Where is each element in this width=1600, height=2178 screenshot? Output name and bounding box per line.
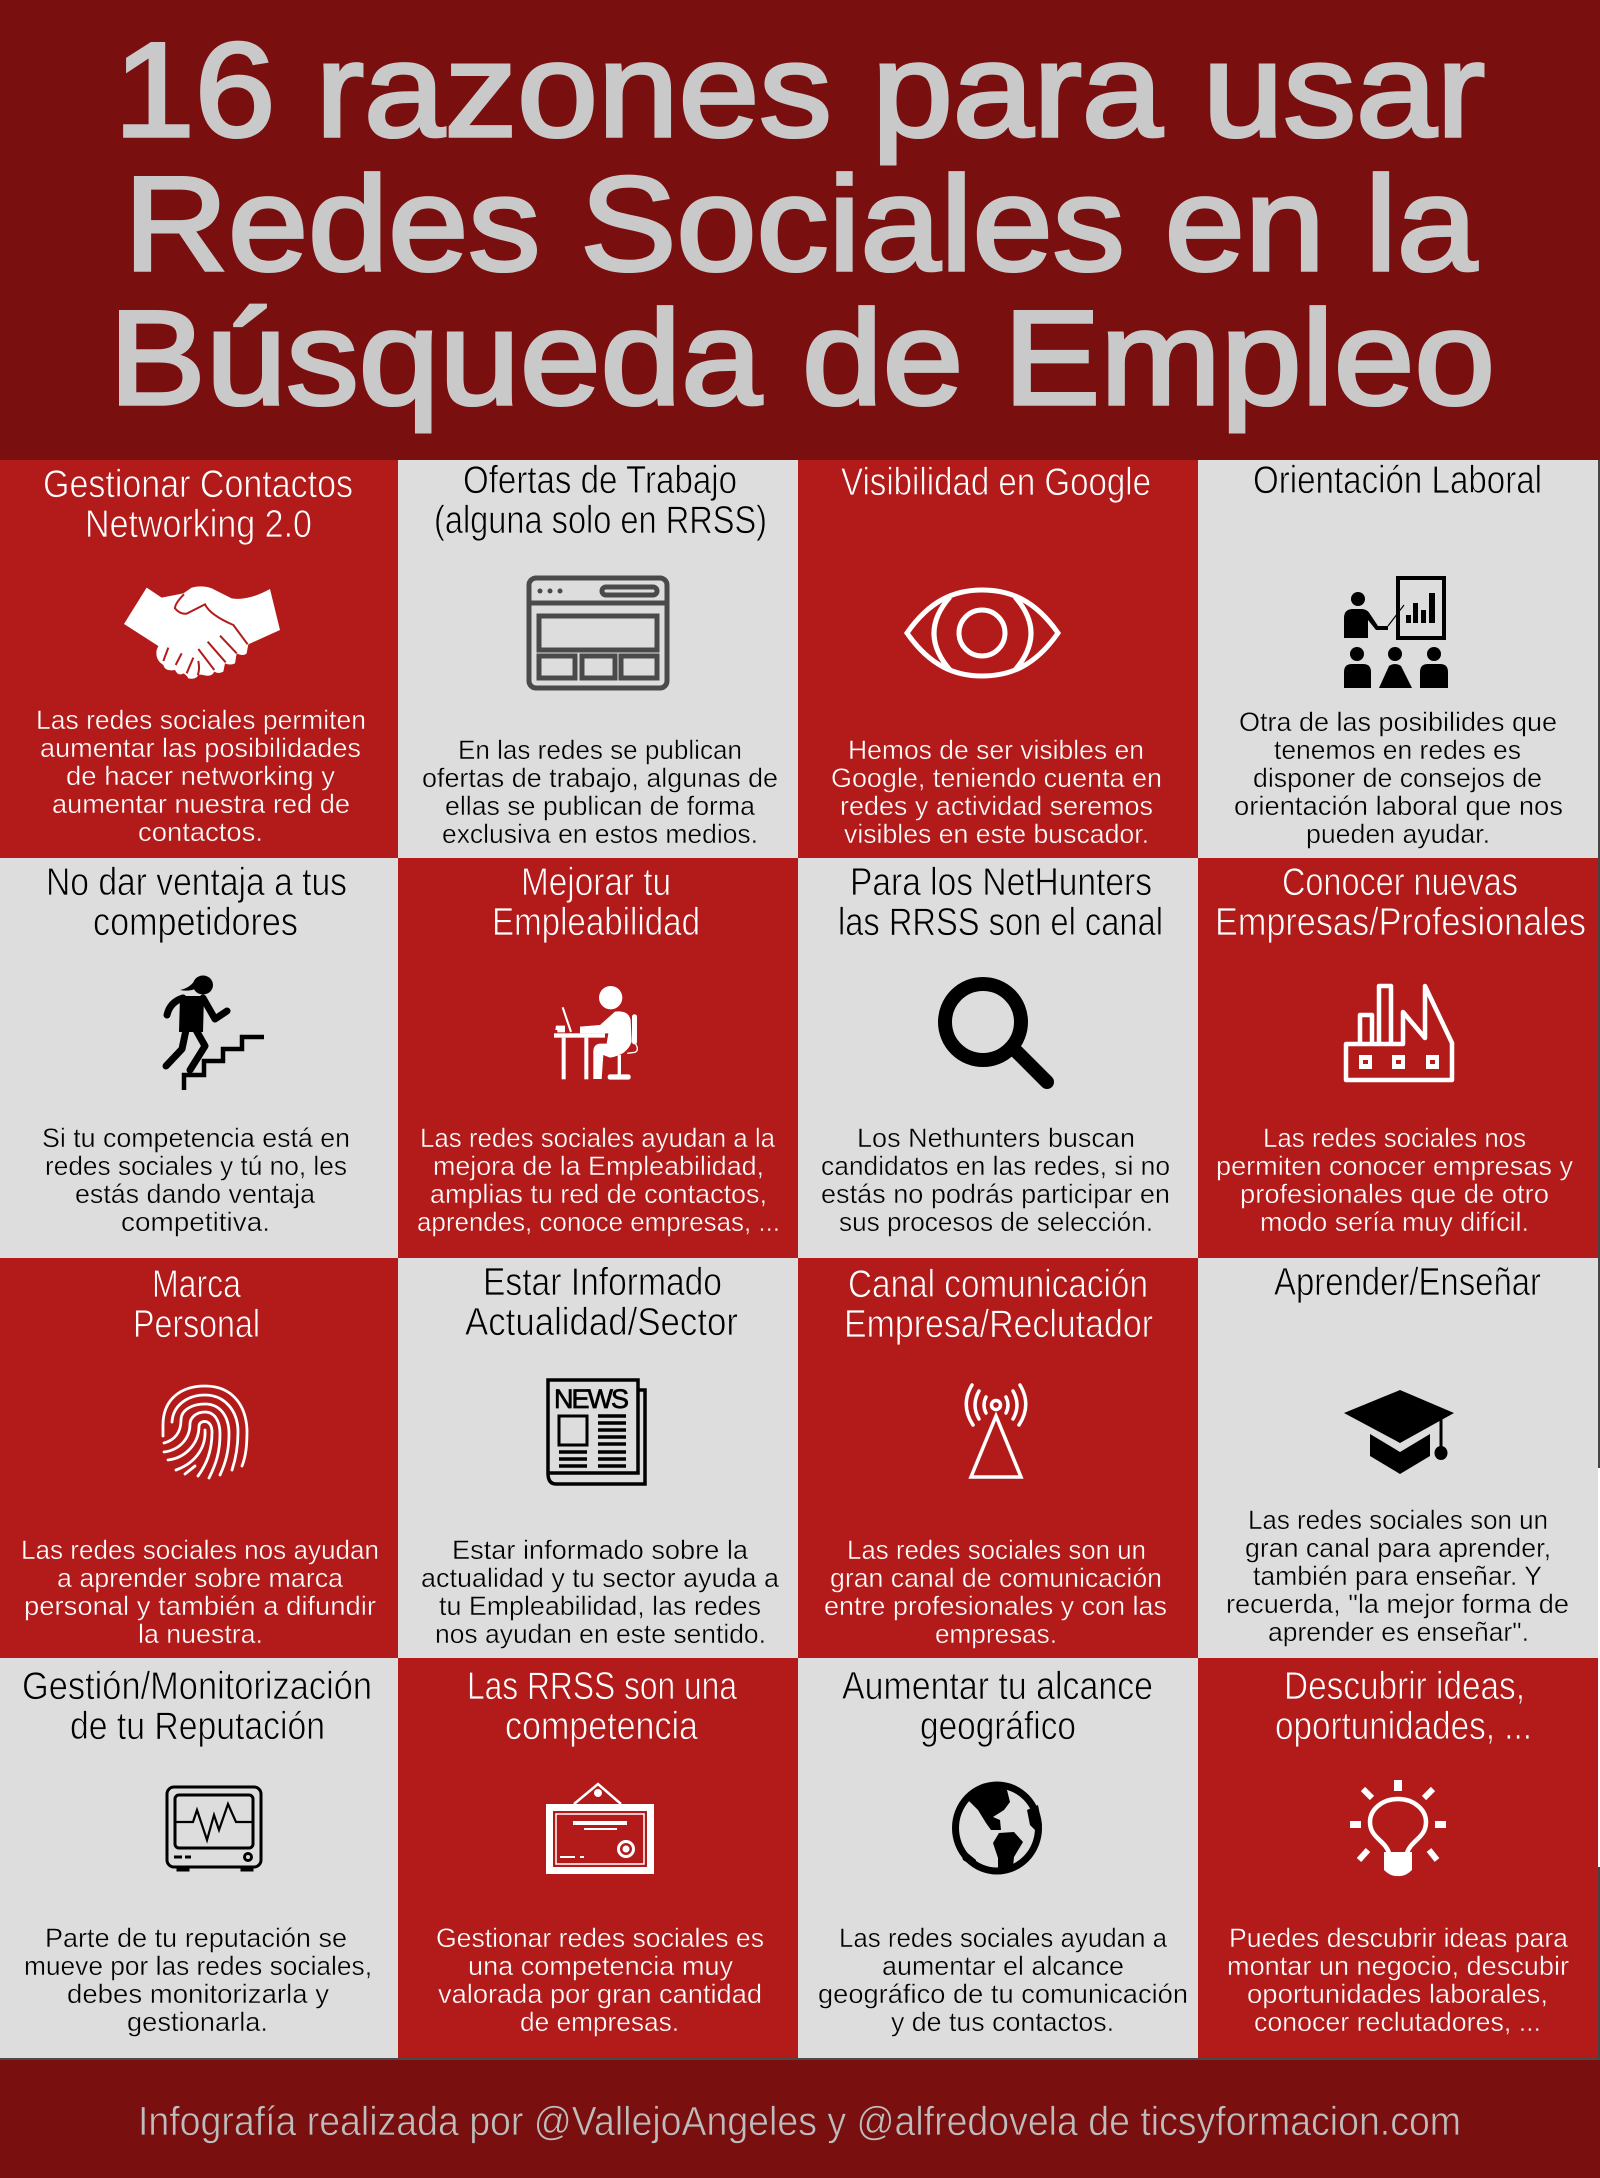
body text: aprendes, conoce empresas, ... bbox=[417, 1207, 780, 1237]
heading: Personal bbox=[133, 1303, 260, 1346]
body text bbox=[1216, 1123, 1573, 1237]
body text: Parte de tu reputación se bbox=[45, 1923, 347, 1953]
icon: newspaper bbox=[548, 1380, 645, 1484]
body text: Google, teniendo cuenta en bbox=[831, 763, 1162, 793]
body text: recuerda, "la mejor forma de bbox=[1226, 1589, 1569, 1619]
panel: Orientación Laboral bbox=[1198, 459, 1598, 858]
heading bbox=[838, 861, 1163, 944]
icon: newspaper: NEWS bbox=[554, 1384, 629, 1414]
body text bbox=[417, 1123, 780, 1237]
title bbox=[109, 16, 1495, 433]
panel: Aprender/Enseñar bbox=[1198, 1258, 1598, 1658]
panel: No dar ventaja bbox=[0, 858, 398, 1258]
body text: de hacer networking y bbox=[66, 761, 335, 791]
body text: empresas. bbox=[935, 1619, 1057, 1649]
body text: redes y actividad seremos bbox=[840, 791, 1153, 821]
panel: NetHunters bbox=[798, 858, 1198, 1258]
heading: Mejorar tu bbox=[521, 861, 671, 904]
body text bbox=[1226, 1505, 1569, 1647]
body text: amplias tu red de contactos, bbox=[430, 1179, 767, 1209]
panel: Ofertas de Trabajo bbox=[398, 459, 798, 858]
body text: competitiva. bbox=[121, 1207, 270, 1237]
heading: competidores bbox=[93, 901, 298, 944]
icon: magnifier bbox=[945, 984, 1047, 1082]
body text bbox=[421, 1535, 780, 1649]
panel: Las RRSS son una competencia bbox=[398, 1658, 798, 2058]
icon: framed diploma bbox=[546, 1784, 654, 1874]
body text: contactos. bbox=[138, 817, 263, 847]
body text: debes monitorizarla y bbox=[67, 1979, 330, 2009]
heading: Networking 2.0 bbox=[85, 503, 312, 546]
body text: gran canal de comunicación bbox=[830, 1563, 1162, 1593]
heading bbox=[43, 463, 353, 546]
heading bbox=[465, 1261, 738, 1344]
icon: globe bbox=[956, 1785, 1042, 1873]
heading: Descubrir ideas, bbox=[1284, 1665, 1525, 1708]
heading: Para los NetHunters bbox=[850, 861, 1152, 904]
body text: aumentar las posibilidades bbox=[40, 733, 361, 763]
body text: y de tus contactos. bbox=[891, 2007, 1114, 2037]
body text: entre profesionales y con las bbox=[824, 1591, 1167, 1621]
icon: eye bbox=[907, 590, 1058, 676]
header banner bbox=[0, 0, 1600, 460]
heading: geográfico bbox=[920, 1705, 1076, 1748]
body text bbox=[824, 1535, 1167, 1649]
panel: Gestionar Contactos bbox=[0, 460, 398, 858]
body text: gestionarla. bbox=[127, 2007, 268, 2037]
heading: Gestionar Contactos bbox=[43, 463, 353, 506]
body text: la nuestra. bbox=[138, 1619, 263, 1649]
icon: presenter and audience bbox=[1344, 578, 1448, 688]
body text bbox=[36, 705, 366, 847]
heading bbox=[1215, 861, 1586, 944]
icon: fingerprint bbox=[163, 1386, 247, 1478]
body text: de empresas. bbox=[520, 2007, 679, 2037]
heading bbox=[842, 1665, 1153, 1748]
body text bbox=[818, 1923, 1188, 2037]
heading: Marca bbox=[152, 1263, 241, 1306]
heading: No dar ventaja a tus bbox=[46, 861, 347, 904]
heading: Estar Informado bbox=[483, 1261, 722, 1304]
body text bbox=[24, 1923, 372, 2037]
body text: Las redes sociales ayudan a bbox=[839, 1923, 1168, 1953]
body text: una competencia muy bbox=[468, 1951, 733, 1981]
body text: tenemos en redes es bbox=[1274, 735, 1521, 765]
body text: ellas se publican de forma bbox=[445, 791, 756, 821]
body text: actualidad y tu sector ayuda a bbox=[421, 1563, 780, 1593]
body text: conocer reclutadores, ... bbox=[1254, 2007, 1541, 2037]
body text: visibles en este buscador. bbox=[844, 819, 1149, 849]
body text: orientación laboral que nos bbox=[1234, 791, 1563, 821]
heading: Aprender/Enseñar bbox=[1274, 1261, 1541, 1304]
body text: Las redes sociales permiten bbox=[36, 705, 366, 735]
body text: exclusiva en estos medios. bbox=[442, 819, 758, 849]
panel: Canal comunicación bbox=[798, 1258, 1198, 1658]
heading: Aumentar tu alcance bbox=[842, 1665, 1153, 1708]
body text: tu Empleabilidad, las redes bbox=[439, 1591, 761, 1621]
heading: oportunidades, ... bbox=[1275, 1705, 1532, 1748]
heading: (alguna solo en RRSS) bbox=[434, 499, 767, 542]
body text: aumentar el alcance bbox=[882, 1951, 1124, 1981]
heading: Visibilidad en Google bbox=[841, 461, 1151, 504]
body text: valorada por gran cantidad bbox=[438, 1979, 762, 2009]
body text bbox=[42, 1123, 350, 1237]
body text bbox=[831, 735, 1162, 849]
heading: Empleabilidad bbox=[492, 901, 700, 944]
body text: nos ayudan en este sentido. bbox=[435, 1619, 766, 1649]
icon: light bulb bbox=[1350, 1780, 1446, 1876]
body text: Otra de las posibilides que bbox=[1239, 707, 1557, 737]
body text: Hemos de ser visibles en bbox=[848, 735, 1144, 765]
body text: candidatos en las redes, si no bbox=[821, 1151, 1170, 1181]
icon: monitor with pulse bbox=[167, 1787, 261, 1870]
body text: En las redes se publican bbox=[458, 735, 742, 765]
body text: Puedes descubrir ideas para bbox=[1229, 1923, 1569, 1953]
body text: disponer de consejos de bbox=[1253, 763, 1542, 793]
body text: oportunidades laborales, bbox=[1247, 1979, 1548, 2009]
panel: Marca Personal bbox=[0, 1258, 398, 1658]
footer banner bbox=[0, 2060, 1600, 2178]
heading: Empresa/Reclutador bbox=[844, 1303, 1153, 1346]
panel: Conocer nuevas Empresas bbox=[1198, 858, 1598, 1258]
icon: factory bbox=[1346, 986, 1452, 1080]
heading bbox=[133, 1263, 260, 1346]
body text: Estar informado sobre la bbox=[452, 1535, 749, 1565]
body text: profesionales que de otro bbox=[1240, 1179, 1549, 1209]
heading: Conocer nuevas bbox=[1282, 861, 1518, 904]
body text: Las redes sociales son un bbox=[1248, 1505, 1548, 1535]
icon: handshake bbox=[124, 586, 280, 679]
heading: Las RRSS son una bbox=[467, 1665, 737, 1708]
heading: Ofertas de Trabajo bbox=[463, 459, 737, 502]
icon: antenna bbox=[966, 1385, 1026, 1477]
body text: aumentar nuestra red de bbox=[52, 789, 350, 819]
panel: Estar Informado bbox=[398, 1258, 798, 1658]
body text: Si tu competencia está en bbox=[42, 1123, 350, 1153]
icon: runner on stairs bbox=[166, 976, 264, 1090]
heading: Gestión/Monitorización bbox=[22, 1665, 372, 1708]
body text: mejora de la Empleabilidad, bbox=[433, 1151, 764, 1181]
body text bbox=[422, 735, 778, 849]
body text: estás dando ventaja bbox=[75, 1179, 316, 1209]
body text: Los Nethunters buscan bbox=[857, 1123, 1135, 1153]
icon: graduation cap bbox=[1344, 1390, 1454, 1474]
title: Búsqueda de Empleo bbox=[109, 284, 1495, 433]
body text: Las redes sociales son un bbox=[847, 1535, 1146, 1565]
body text: ofertas de trabajo, algunas de bbox=[422, 763, 778, 793]
body text: permiten conocer empresas y bbox=[1216, 1151, 1573, 1181]
heading bbox=[467, 1665, 737, 1748]
body text: montar un negocio, descubir bbox=[1227, 1951, 1569, 1981]
body text bbox=[436, 1923, 764, 2037]
heading: de tu Reputación bbox=[70, 1705, 325, 1748]
body text: modo sería muy difícil. bbox=[1260, 1207, 1529, 1237]
body text: también para enseñar. Y bbox=[1253, 1561, 1542, 1591]
body text: Las redes sociales nos ayudan bbox=[21, 1535, 379, 1565]
heading: las RRSS son el canal bbox=[838, 901, 1163, 944]
heading bbox=[22, 1665, 372, 1748]
heading: Canal comunicación bbox=[848, 1263, 1148, 1306]
body text: gran canal para aprender, bbox=[1245, 1533, 1551, 1563]
body text bbox=[1227, 1923, 1569, 2037]
panel: Aumentar tu alcance bbox=[798, 1658, 1198, 2058]
heading bbox=[492, 861, 700, 944]
body text bbox=[21, 1535, 379, 1649]
heading: Actualidad/Sector bbox=[465, 1301, 738, 1344]
title: 16 razones para usar bbox=[114, 16, 1485, 165]
body text bbox=[821, 1123, 1170, 1237]
body text: Las redes sociales ayudan a la bbox=[420, 1123, 776, 1153]
body text bbox=[1234, 707, 1563, 849]
body text: sus procesos de selección. bbox=[839, 1207, 1153, 1237]
title: Redes Sociales en la bbox=[124, 150, 1478, 299]
body text: redes sociales y tú no, les bbox=[45, 1151, 347, 1181]
body text: geográfico de tu comunicación bbox=[818, 1979, 1188, 2009]
panel: Mejorar tu Empleabilidad bbox=[398, 858, 798, 1258]
heading bbox=[1275, 1665, 1532, 1748]
panel: Visibilidad en Google bbox=[798, 460, 1198, 858]
body text: mueve por las redes sociales, bbox=[24, 1951, 372, 1981]
heading bbox=[434, 459, 767, 542]
body text: personal y también a difundir bbox=[24, 1591, 376, 1621]
icon: person at desk bbox=[554, 986, 637, 1080]
footer credit text: Infografía realizada por @VallejoAngeles y @alfredovela de ticsyformacion.com bbox=[138, 2098, 1461, 2144]
heading: competencia bbox=[505, 1705, 698, 1748]
icon: browser window bbox=[529, 578, 667, 688]
body text: Las redes sociales nos bbox=[1263, 1123, 1526, 1153]
panel: Gestión/Monitorización bbox=[0, 1658, 398, 2058]
heading: Orientación Laboral bbox=[1253, 459, 1542, 502]
panel: Descubrir ideas bbox=[1198, 1658, 1598, 2058]
heading bbox=[844, 1263, 1153, 1346]
body text: estás no podrás participar en bbox=[821, 1179, 1170, 1209]
heading bbox=[46, 861, 347, 944]
body text: a aprender sobre marca bbox=[57, 1563, 344, 1593]
body text: pueden ayudar. bbox=[1306, 819, 1490, 849]
body text: Gestionar redes sociales es bbox=[436, 1923, 764, 1953]
body text: aprender es enseñar". bbox=[1268, 1617, 1529, 1647]
